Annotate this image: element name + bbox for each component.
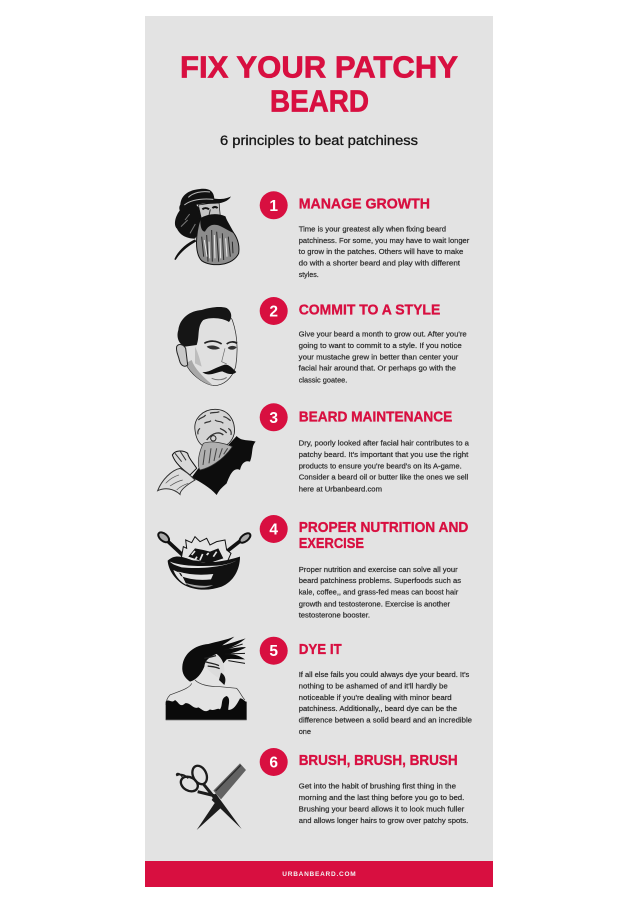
heading: proper nutrition and exercise bbox=[299, 519, 468, 552]
body text: patchiness. For some, you may have to wait longer bbox=[299, 236, 470, 245]
number badge 1: 1 bbox=[269, 198, 278, 215]
number badge 2: 2 bbox=[269, 304, 278, 320]
body text: here at Urbanbeard.com bbox=[299, 484, 382, 493]
body text: difference between a solid beard and an incredible bbox=[299, 716, 472, 725]
body text: Get into the habit of brushing first thing in the bbox=[299, 781, 456, 790]
body text: your mustache grew in better than center your bbox=[299, 352, 459, 361]
body text: morning and the last thing before you go to bed. bbox=[299, 793, 464, 802]
body text: going to want to commit to a style. If you notice bbox=[299, 341, 462, 350]
icon: woman with windswept hair bbox=[166, 637, 247, 720]
footer text: URBANBEARD.COM bbox=[282, 871, 356, 878]
panel: step 1 manage growth bbox=[174, 189, 470, 279]
heading: commit to a style: COMMIT TO A STYLE bbox=[299, 302, 440, 318]
body text: beard patchiness problems. Superfoods such as bbox=[299, 576, 461, 585]
body text bbox=[299, 330, 467, 384]
icon: salad bowl bbox=[156, 530, 252, 590]
number badge 3 bbox=[260, 403, 288, 431]
icon: man with mustache bbox=[176, 307, 237, 386]
number badge 6 bbox=[260, 748, 288, 776]
heading: proper nutrition and exercise: PROPER NUTRITION AND bbox=[299, 519, 468, 536]
body text bbox=[299, 439, 470, 493]
body text: Proper nutrition and exercise can solve all your bbox=[299, 565, 458, 574]
heading: proper nutrition and exercise: EXERCISE bbox=[299, 535, 364, 552]
panel: step 5 dye it bbox=[166, 637, 472, 736]
number badge 6: 6 bbox=[269, 754, 278, 772]
panel: step 2 commit to a style bbox=[176, 297, 467, 386]
body text bbox=[299, 565, 461, 620]
heading: dye it: DYE IT bbox=[299, 641, 342, 658]
title: FIX YOUR PATCHY bbox=[180, 50, 458, 85]
icon: old man reading bbox=[158, 409, 256, 495]
heading: manage growth: MANAGE GROWTH bbox=[299, 196, 430, 212]
number badge 1 bbox=[260, 191, 288, 219]
subtitle: 6 principles to beat patchiness bbox=[220, 133, 418, 148]
footer bar bbox=[145, 861, 493, 887]
body text: patchiness. Additionally,, beard dye can be the bbox=[299, 704, 457, 713]
body text: styles. bbox=[299, 270, 319, 279]
body text: one bbox=[299, 727, 311, 736]
body text: facial hair around that. Or perhaps go with the bbox=[299, 364, 456, 373]
body text bbox=[299, 224, 470, 279]
body text: do with a shorter beard and play with different bbox=[299, 258, 461, 267]
body text: nothing to be ashamed of and it'll hardly be bbox=[299, 681, 448, 690]
body text: kale, coffee,, and grass-fed meas can boost hair bbox=[299, 588, 459, 597]
body text: products to ensure you're beard's on its A-game. bbox=[299, 461, 462, 470]
body text: Dry, poorly looked after facial hair contributes to a bbox=[299, 439, 470, 448]
body text bbox=[299, 670, 472, 736]
title: BEARD bbox=[270, 84, 369, 119]
number badge 5 bbox=[260, 637, 288, 665]
panel: step 3 beard maintenance bbox=[158, 403, 470, 495]
title bbox=[180, 50, 458, 119]
body text: Time is your greatest ally when fixing beard bbox=[299, 224, 446, 233]
body text: to grow in the patches. Others will have to make bbox=[299, 247, 463, 256]
icon: bearded man with hat bbox=[174, 189, 239, 265]
body text: growth and testosterone. Exercise is another bbox=[299, 599, 450, 608]
number badge 4 bbox=[260, 515, 288, 543]
number badge 4: 4 bbox=[269, 522, 278, 538]
body text: Brushing your beard allows it to look much fuller bbox=[299, 805, 465, 814]
number badge 2 bbox=[260, 297, 288, 325]
panel: grey background bbox=[145, 16, 493, 887]
body text: Give your beard a month to grow out. After you're bbox=[299, 330, 467, 339]
heading: brush brush brush: BRUSH, BRUSH, BRUSH bbox=[299, 752, 458, 769]
body text: Consider a beard oil or butter like the ones we sell bbox=[299, 473, 469, 482]
body text: patchy beard. It's important that you use the right bbox=[299, 450, 469, 459]
number badge 5: 5 bbox=[269, 643, 278, 660]
body text bbox=[299, 781, 468, 825]
panel: step 4 nutrition and exercise bbox=[156, 515, 468, 620]
body text: noticeable if you're dealing with minor beard bbox=[299, 693, 452, 702]
body text: classic goatee. bbox=[299, 375, 347, 384]
heading: beard maintenance: BEARD MAINTENANCE bbox=[299, 408, 452, 426]
number badge 3: 3 bbox=[269, 410, 278, 427]
body text: testosterone booster. bbox=[299, 611, 370, 620]
body text: If all else fails you could always dye your beard. It's bbox=[299, 670, 469, 679]
panel: step 6 brush bbox=[177, 748, 468, 830]
icon: scissors and comb bbox=[177, 763, 246, 830]
body text: and allows longer hairs to grow over patchy spots. bbox=[299, 816, 468, 825]
